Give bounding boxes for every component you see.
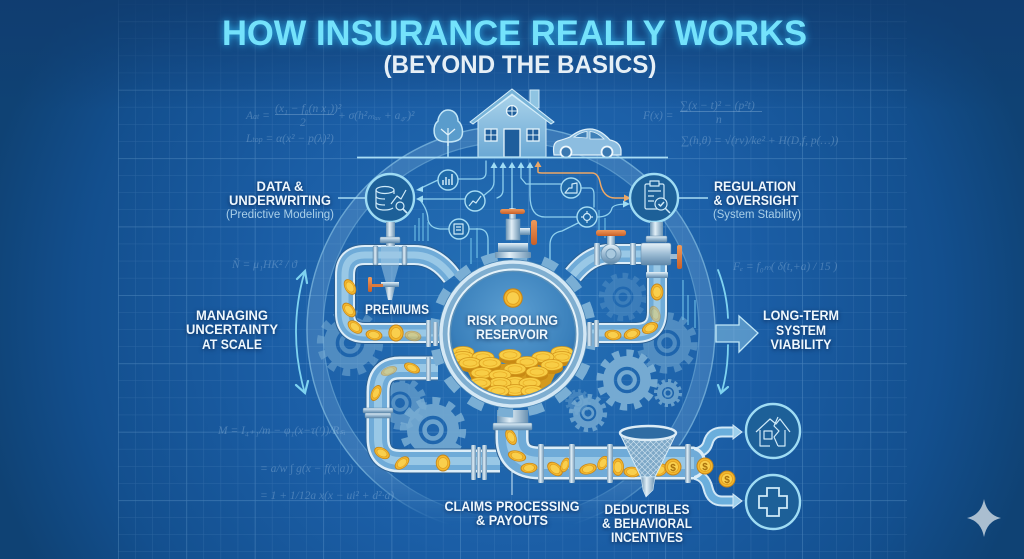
label: claims processing bbox=[444, 470, 580, 528]
label: managing uncertainty: MANAGING bbox=[196, 308, 268, 323]
data bars decoration bbox=[414, 210, 696, 328]
ground line bbox=[357, 156, 668, 158]
label: long-term viability: VIABILITY bbox=[770, 337, 832, 352]
label: long-term viability bbox=[763, 308, 839, 352]
arrow: right curved flow bbox=[718, 270, 728, 393]
formulas: background equations: Aat = bbox=[245, 110, 270, 122]
formulas: background equations: M = I₄₊₁/m − φ₁(x−τ(ʳ))/Rₛᵢ bbox=[217, 425, 346, 437]
icon: small document circle bbox=[449, 219, 469, 239]
label: risk pooling reservoir: RESERVOIR bbox=[476, 327, 548, 342]
pipe: claims main line bbox=[493, 410, 742, 508]
formulas: background equations: Ltop = α(x² − p(λ)²) bbox=[245, 133, 334, 145]
formulas: background equations: (x₁ − f₀(n x₁))² bbox=[275, 103, 342, 115]
formulas: background equations: ∑(h,θ) = √(rv)/ke² + H(D,f, p(…)) bbox=[681, 134, 838, 147]
formulas: background equations: F(x) = bbox=[642, 110, 673, 122]
outer ring: managing uncertainty cycle bbox=[307, 126, 715, 534]
formulas: background equations: 2 bbox=[300, 117, 306, 129]
pipe: claims main line: $ bbox=[724, 475, 730, 486]
icon: regulation clipboard circle bbox=[630, 174, 678, 222]
label: deductibles: INCENTIVES bbox=[611, 530, 683, 545]
icon: data underwriting circle bbox=[366, 174, 414, 222]
arrow: left double-headed uncertainty bbox=[296, 271, 308, 393]
subtitle: (BEYOND THE BASICS) bbox=[384, 51, 656, 79]
label: long-term viability: LONG-TERM bbox=[763, 308, 839, 323]
floating coin bbox=[502, 287, 524, 309]
icon: house bbox=[470, 89, 554, 157]
icon: car bbox=[554, 129, 621, 158]
pipe: claims main line: $ bbox=[670, 463, 676, 474]
pipe: claims main line: $ bbox=[702, 462, 708, 473]
formulas: background equations: ∑(x − t)² − (p²t) bbox=[680, 100, 755, 112]
label: deductibles: & BEHAVIORAL bbox=[602, 516, 692, 531]
title: HOW INSURANCE REALLY WORKS bbox=[222, 14, 807, 53]
formulas: background equations: n bbox=[716, 114, 722, 126]
label: data and underwriting: UNDERWRITING bbox=[229, 193, 331, 208]
formulas: background equations: = a/w ∫ g(x − f(x|a)) bbox=[260, 463, 353, 475]
label: regulation and oversight: (System Stability) bbox=[713, 209, 801, 221]
side flanges bbox=[426, 320, 599, 381]
label: regulation and oversight bbox=[713, 179, 801, 221]
formulas: background equations: + σ(h²ₘₐₓ + a₄ᵣ)² bbox=[338, 110, 415, 122]
label: long-term viability: SYSTEM bbox=[776, 323, 826, 338]
top flange and valve bbox=[495, 208, 537, 258]
stem: data to pipe bbox=[368, 222, 407, 300]
icon: tree bbox=[434, 110, 462, 157]
icon: small trend circle bbox=[465, 191, 485, 211]
panel: risk pooling reservoir bbox=[426, 208, 599, 413]
label: data and underwriting: DATA & bbox=[256, 179, 304, 194]
formulas: background equations bbox=[217, 100, 838, 502]
icon: small chart circle bbox=[438, 170, 458, 190]
label: data and underwriting: (Predictive Modeling) bbox=[226, 209, 334, 221]
pipe: right outflow bbox=[573, 222, 682, 341]
wires: connections from house to icons bbox=[416, 161, 631, 262]
funnel: deductibles filter bbox=[620, 426, 676, 497]
connector: regulation label line bbox=[678, 197, 708, 199]
label: risk pooling reservoir: RISK POOLING bbox=[467, 313, 558, 328]
label: managing uncertainty: UNCERTAINTY bbox=[186, 322, 278, 337]
arrow: long-term viability bbox=[716, 316, 758, 352]
label: managing uncertainty bbox=[186, 308, 278, 352]
label: claims processing: CLAIMS PROCESSING bbox=[444, 499, 580, 514]
coin pile bbox=[452, 346, 573, 400]
icon: small bar circle right bbox=[561, 178, 581, 198]
formulas: background equations: Ñ = μ₁HK² / ϑ bbox=[231, 257, 298, 271]
label: regulation and oversight: & OVERSIGHT bbox=[714, 193, 799, 208]
gears: background machinery bbox=[321, 276, 693, 459]
icon: damaged house circle bbox=[746, 404, 800, 458]
icon: sparkle bbox=[967, 499, 1001, 537]
formulas: background equations: Fₑ = f₀ₘ( δ(t,+a) / 15 ) bbox=[732, 261, 838, 273]
label: premiums: PREMIUMS bbox=[365, 302, 429, 317]
label: data and underwriting bbox=[226, 179, 334, 221]
pipe: lower left return bbox=[363, 361, 500, 480]
label: claims processing: & PAYOUTS bbox=[476, 513, 548, 528]
formulas: background equations: = 1 + 1/12a x(x − ui² + d²·a) bbox=[260, 490, 394, 502]
label: deductibles bbox=[602, 502, 692, 545]
label: risk pooling reservoir bbox=[467, 313, 558, 342]
icon: medical plus circle bbox=[746, 475, 800, 529]
label: deductibles: DEDUCTIBLES bbox=[604, 502, 690, 517]
icon: small node circle right bbox=[577, 207, 597, 227]
stem and valves: regulation pipe bbox=[594, 222, 682, 278]
connector: data label line bbox=[338, 197, 366, 199]
label: managing uncertainty: AT SCALE bbox=[202, 337, 262, 352]
label: regulation and oversight: REGULATION bbox=[714, 179, 796, 194]
pipe: premiums loop bbox=[340, 222, 452, 342]
